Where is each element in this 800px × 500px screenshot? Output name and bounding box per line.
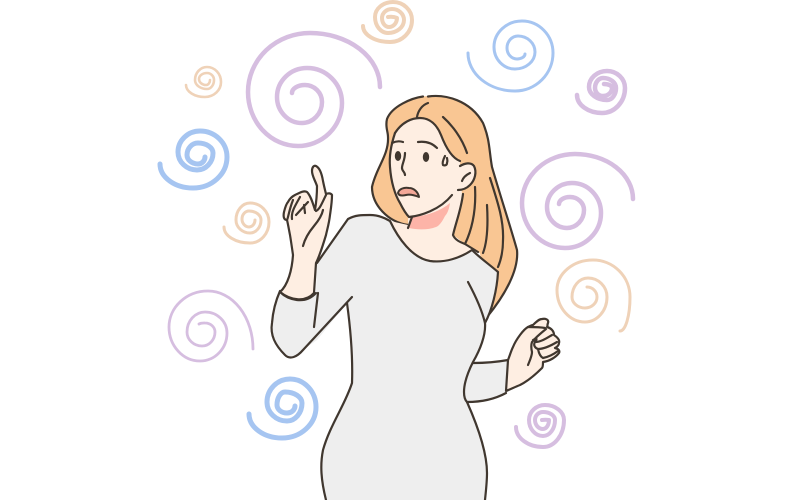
jaw to shadow edge — [408, 217, 412, 228]
spiral: blue lower — [249, 379, 316, 438]
ear inner — [462, 173, 470, 181]
spiral: large purple top left — [248, 33, 380, 146]
hair strands — [417, 103, 503, 267]
neck — [390, 194, 472, 262]
woman figure — [272, 96, 559, 500]
spiral: blue top — [468, 21, 553, 91]
spiral: beige top — [363, 2, 412, 42]
mouth — [398, 188, 419, 197]
right sleeve fill — [464, 360, 508, 402]
eye right — [423, 152, 429, 162]
nose — [402, 153, 405, 175]
face — [390, 118, 462, 217]
spiral: purple bottom right — [516, 405, 564, 447]
spiral: blue left — [160, 131, 227, 188]
right hand finger details — [528, 327, 558, 365]
left cuff line — [280, 292, 316, 300]
eye left — [395, 151, 401, 161]
right hand — [506, 319, 559, 391]
right sleeve lines — [467, 360, 508, 402]
face outline — [395, 118, 460, 161]
spiral: large purple right — [522, 154, 633, 248]
spiral: small beige top left — [186, 67, 221, 97]
left hand — [280, 166, 332, 299]
dress outline — [317, 215, 498, 500]
back hair — [372, 96, 517, 318]
neck shadow — [409, 203, 450, 229]
spiral: beige right — [557, 260, 630, 331]
sweat drop — [443, 156, 447, 165]
spiral: small purple top right — [577, 71, 625, 113]
brows — [392, 141, 437, 148]
left hand finger details — [287, 195, 326, 246]
spiral: purple lower left — [169, 291, 253, 361]
ear — [458, 163, 475, 190]
spiral: beige mid left — [224, 203, 269, 243]
hair outline — [428, 96, 517, 317]
dress body — [272, 215, 498, 500]
